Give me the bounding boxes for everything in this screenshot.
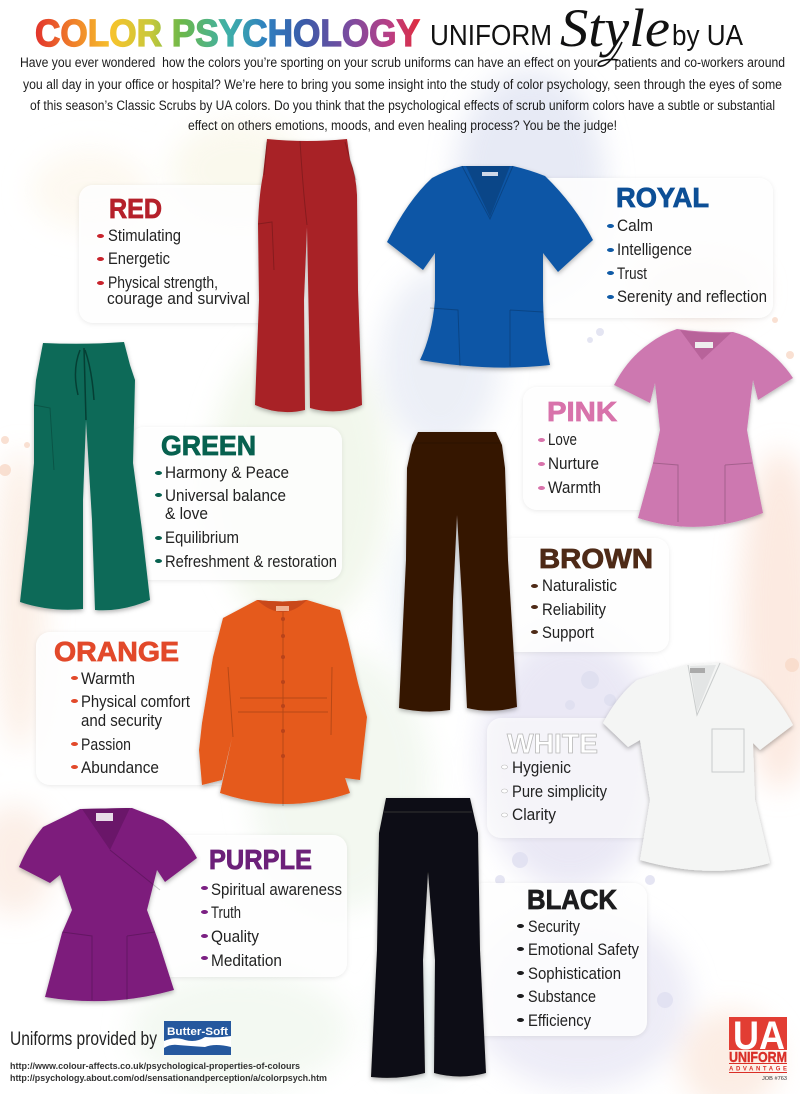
garment: royal scrub top xyxy=(387,166,593,368)
list: black traits: Emotional Safety xyxy=(528,941,640,959)
list: orange traits: Passion xyxy=(81,736,131,754)
list: purple traits: Meditation xyxy=(211,952,282,970)
garment: red pants xyxy=(255,139,362,412)
title: uniform: UNIFORM xyxy=(430,20,552,52)
intro text block: effect on others emotions, moods, and even healing process? You be the judge! xyxy=(188,118,617,134)
list: brown traits: Support xyxy=(542,624,594,642)
intro text block xyxy=(20,55,785,134)
list: red traits: Physical strength, xyxy=(108,274,218,292)
sources xyxy=(10,1061,327,1083)
list: black traits: Sophistication xyxy=(528,965,621,983)
heading: purple: PURPLE xyxy=(209,844,312,875)
list: green traits: Equilibrium xyxy=(165,529,239,547)
logo: butter-soft xyxy=(164,1021,231,1055)
logo: uniform advantage: UA xyxy=(733,1014,785,1058)
list: purple traits xyxy=(201,881,342,970)
list: green traits: Harmony & Peace xyxy=(165,464,289,482)
panel: green xyxy=(130,427,342,580)
list: brown traits: Naturalistic xyxy=(542,577,617,595)
list: pink traits: Nurture xyxy=(548,455,599,473)
credit: uniforms provided by: Uniforms provided by xyxy=(10,1029,157,1050)
list: white traits xyxy=(502,759,608,824)
garment: orange jacket xyxy=(199,600,367,806)
garment: white scrub top xyxy=(603,663,793,871)
list: orange traits: Physical comfort xyxy=(81,693,190,711)
panel: purple xyxy=(150,835,347,977)
list: black traits: Security xyxy=(528,918,581,936)
list: orange traits: and security xyxy=(81,712,163,730)
list: pink traits: Love xyxy=(548,431,577,449)
logo: uniform advantage: UNIFORM xyxy=(729,1049,787,1066)
list: orange traits: Abundance xyxy=(81,759,159,777)
list: red traits: Stimulating xyxy=(108,227,181,245)
list: royal traits: Intelligence xyxy=(617,241,692,259)
list: brown traits: Reliability xyxy=(542,601,607,619)
garment: green pants xyxy=(20,342,150,610)
list: red traits: courage and survival xyxy=(107,290,250,308)
heading: orange: ORANGE xyxy=(54,636,179,667)
garment: brown pants xyxy=(399,432,517,712)
panel: black xyxy=(470,883,647,1036)
list: royal traits: Trust xyxy=(617,265,647,283)
heading: brown: BROWN xyxy=(539,543,653,574)
heading: black: BLACK xyxy=(527,884,617,915)
list: purple traits: Spiritual awareness xyxy=(211,881,342,899)
list: green traits: Universal balance xyxy=(165,487,286,505)
list: orange traits: Warmth xyxy=(81,670,135,688)
list: white traits: Pure simplicity xyxy=(512,783,608,801)
panel: white xyxy=(487,718,657,838)
logo: uniform advantage xyxy=(729,1014,787,1082)
panel: brown xyxy=(500,538,669,652)
list: orange traits xyxy=(71,670,190,777)
list: royal traits xyxy=(607,217,767,306)
heading: white: WHITE xyxy=(507,728,598,759)
list: green traits: Refreshment & restoration xyxy=(165,553,337,571)
list: purple traits: Truth xyxy=(211,904,241,922)
list: pink traits xyxy=(538,431,601,497)
list: brown traits xyxy=(531,577,617,642)
list: green traits: & love xyxy=(165,505,208,523)
garment: black pants xyxy=(371,798,486,1078)
list: green traits xyxy=(155,464,337,571)
logo: uniform advantage: ADVANTAGE xyxy=(729,1066,787,1072)
logo: uniform advantage: JOB #763 xyxy=(762,1076,787,1082)
title: by UA: by UA xyxy=(672,20,744,52)
heading: pink: PINK xyxy=(547,396,617,427)
title xyxy=(35,0,744,66)
heading: green: GREEN xyxy=(161,430,256,461)
logo: butter-soft: Butter-Soft xyxy=(167,1026,228,1038)
heading: royal: ROYAL xyxy=(616,182,709,213)
list: red traits: Energetic xyxy=(108,250,170,268)
list: royal traits: Calm xyxy=(617,217,653,235)
title: color psychology: COLOR PSYCHOLOGY xyxy=(35,13,420,55)
list: white traits: Hygienic xyxy=(512,759,571,777)
list: black traits: Efficiency xyxy=(528,1012,592,1030)
list: purple traits: Quality xyxy=(211,928,260,946)
sources: http://www.colour-affects.co.uk/psychological-properties-of-colours xyxy=(10,1061,300,1071)
sources: http://psychology.about.com/od/sensationandperception/a/colorpsych.htm xyxy=(10,1073,327,1083)
garment: purple scrub top xyxy=(19,808,197,1001)
panel: pink xyxy=(523,387,683,510)
panel: red xyxy=(79,185,279,323)
list: royal traits: Serenity and reflection xyxy=(617,288,767,306)
garment: pink scrub top xyxy=(614,329,793,527)
panel: orange xyxy=(36,632,236,785)
list: red traits xyxy=(97,227,250,308)
panel: royal xyxy=(530,178,773,318)
heading: red: RED xyxy=(109,193,162,224)
list: black traits xyxy=(517,918,640,1030)
list: black traits: Substance xyxy=(528,988,596,1006)
list: pink traits: Warmth xyxy=(548,479,601,497)
list: white traits: Clarity xyxy=(512,806,557,824)
